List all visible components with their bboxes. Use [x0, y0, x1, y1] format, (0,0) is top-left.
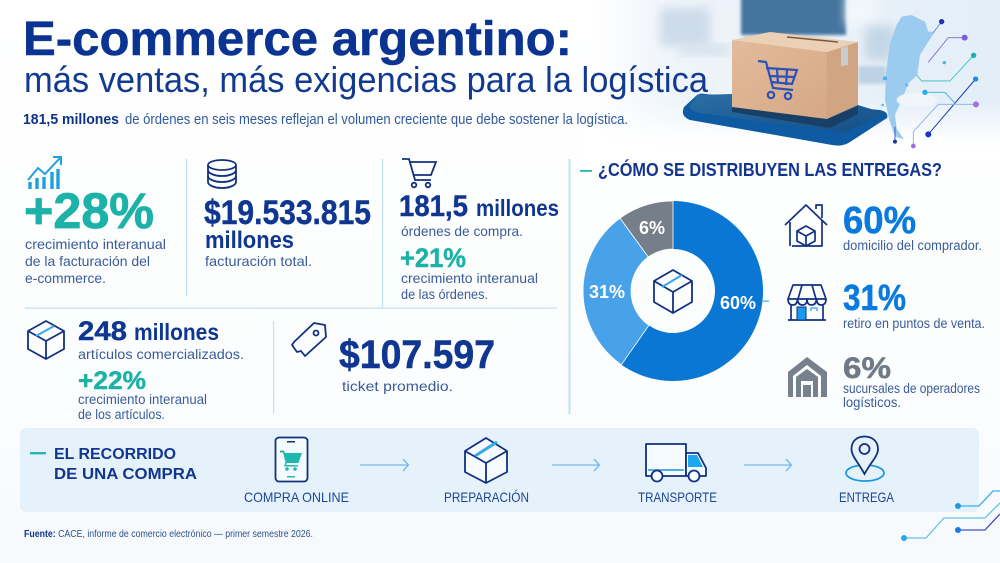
- step: delivery: [839, 436, 895, 505]
- description: sucursales de operadores: [843, 381, 980, 396]
- heading: purchase journey: [30, 446, 197, 483]
- description: facturación total.: [205, 253, 312, 269]
- value 181,5 millones: [399, 190, 559, 223]
- heading: delivery distribution: ¿CÓMO SE DISTRIBUYEN LAS ENTREGAS?: [598, 159, 942, 180]
- donut chart: 60%: [720, 293, 756, 313]
- heading: purchase journey: DE UNA COMPRA: [54, 466, 197, 483]
- description: logísticos.: [843, 395, 901, 410]
- value $107.597: $107.597: [339, 333, 495, 377]
- item: home delivery: [785, 200, 982, 253]
- value unit millones: millones: [205, 227, 294, 254]
- step: transport: [638, 444, 717, 505]
- description: retiro en puntos de venta.: [843, 316, 985, 331]
- description: domicilio del comprador.: [843, 238, 982, 253]
- icon: storefront: [788, 285, 826, 320]
- value 181,5 millones: 181,5: [399, 190, 468, 223]
- stat: total turnover: [204, 160, 371, 269]
- description: órdenes de compra.: [401, 223, 523, 239]
- value 31%: 31%: [843, 277, 906, 318]
- value +28%: +28%: [24, 183, 154, 239]
- step: online purchase: [244, 438, 349, 505]
- value 248 millones: [78, 316, 219, 346]
- step: preparation: [444, 438, 529, 505]
- panel: delivery distribution: [580, 159, 985, 410]
- item: store pickup: [788, 277, 985, 331]
- icon: open parcel: [465, 438, 507, 483]
- growth description: crecimiento interanual: [78, 392, 207, 407]
- map of Argentina with circuit lines: [881, 15, 979, 148]
- icon: shopping cart: [402, 159, 436, 187]
- subtitle: más ventas, más exigencias para la logística: [24, 59, 709, 100]
- value $19.533.815: $19.533.815: [204, 194, 371, 232]
- title: E-commerce argentino:: [23, 13, 572, 66]
- arrow: [744, 459, 792, 471]
- icon: delivery truck: [646, 444, 706, 482]
- icon: warehouse: [788, 357, 827, 397]
- stat: growth of turnover: [24, 157, 166, 286]
- icon: parcel: [28, 321, 64, 359]
- donut chart: 6%: [639, 218, 665, 238]
- growth description: crecimiento interanual: [401, 270, 538, 286]
- cardboard box with cart: [732, 32, 858, 119]
- value 248 millones: millones: [134, 319, 219, 345]
- header photo: box on smartphone with map of Argentina: [580, 0, 1000, 180]
- intro sentence: 181,5 millones: [23, 112, 119, 128]
- arrow: [360, 459, 408, 471]
- source note: Fuente: CACE, informe de comercio electrónico — primer semestre 2026.: [24, 529, 313, 540]
- label: PREPARACIÓN: [444, 489, 529, 505]
- icon: phone with cart: [276, 438, 308, 482]
- label: TRANSPORTE: [638, 489, 717, 505]
- description: de la facturación del: [25, 253, 150, 269]
- value 181,5 millones: millones: [476, 195, 559, 221]
- stat: items sold: [28, 316, 244, 422]
- label: COMPRA ONLINE: [244, 489, 349, 505]
- donut chart: 31%: [589, 282, 625, 302]
- value 248 millones: 248: [78, 316, 127, 346]
- description: e-commerce.: [25, 270, 106, 286]
- label: ENTREGA: [839, 489, 895, 505]
- growth description: de las órdenes.: [401, 286, 488, 302]
- stat: average ticket: [292, 323, 495, 394]
- icon: house with parcel: [785, 205, 827, 246]
- description: crecimiento interanual: [25, 236, 166, 252]
- value 6%: 6%: [843, 352, 891, 385]
- icon: growth chart: [28, 157, 61, 189]
- description: ticket promedio.: [342, 378, 453, 394]
- arrow: [552, 459, 600, 471]
- value +21%: +21%: [400, 243, 466, 273]
- growth description: de los artículos.: [78, 407, 165, 422]
- value +22%: +22%: [78, 367, 146, 395]
- icon: location pin: [846, 436, 884, 481]
- donut chart: [583, 201, 769, 381]
- stat: purchase orders: [399, 159, 559, 302]
- icon: stack of coins: [208, 160, 236, 188]
- icon: price tag: [292, 323, 326, 356]
- item: logistics operators: [788, 352, 980, 410]
- value 60%: 60%: [843, 200, 916, 242]
- icon: parcel in donut centre: [654, 270, 692, 313]
- intro sentence: de órdenes en seis meses reflejan el volumen creciente que debe sostener la logística.: [125, 112, 628, 128]
- decorative circuit lines bottom right: [901, 491, 1000, 541]
- panel: purchase journey: [20, 428, 979, 512]
- description: artículos comercializados.: [78, 346, 244, 362]
- heading: purchase journey: EL RECORRIDO: [54, 446, 176, 463]
- smartphone: [683, 94, 887, 146]
